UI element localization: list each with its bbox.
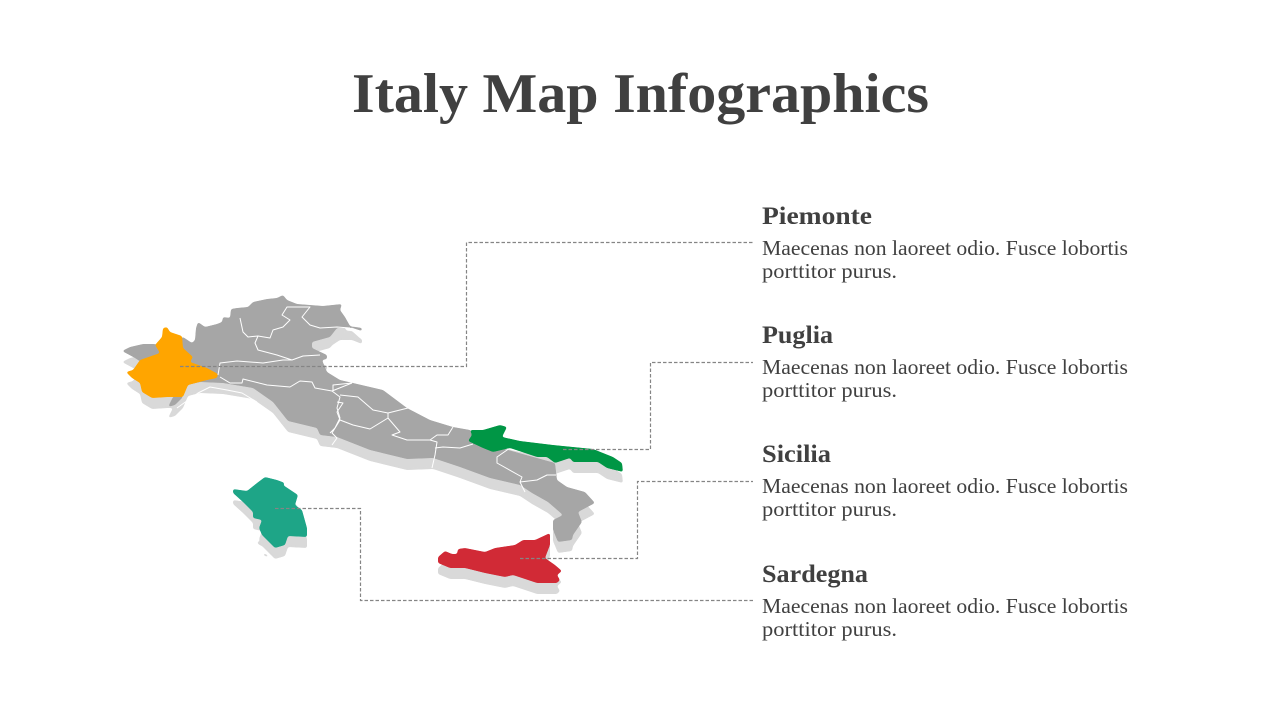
text block: Sardegna: Maecenas non laoreet odio. Fusce lobortis bbox=[762, 594, 1128, 618]
text block: Piemonte bbox=[762, 203, 1128, 283]
text block: Sicilia: Sicilia bbox=[762, 441, 832, 468]
text block: Sicilia bbox=[762, 441, 1128, 521]
text block: Puglia bbox=[762, 322, 1128, 402]
connector: Sicilia bbox=[520, 482, 753, 558]
text block: Puglia: Maecenas non laoreet odio. Fusce lobortis bbox=[762, 355, 1128, 379]
text block: Sicilia: Maecenas non laoreet odio. Fusce lobortis bbox=[762, 474, 1128, 498]
connector: Sardegna bbox=[275, 508, 753, 600]
text block: Piemonte: porttitor purus. bbox=[762, 259, 897, 283]
region: Sicilia bbox=[438, 533, 562, 583]
text block: Sicilia: porttitor purus. bbox=[762, 497, 897, 521]
text block: Puglia: porttitor purus. bbox=[762, 378, 897, 402]
text block: Puglia: Puglia bbox=[762, 322, 834, 349]
region: Puglia bbox=[468, 425, 623, 472]
map drop shadow bbox=[122, 306, 623, 594]
text block: Sardegna: Sardegna bbox=[762, 561, 869, 588]
text block: Sardegna: porttitor purus. bbox=[762, 617, 897, 641]
title: Italy Map Infographics bbox=[352, 63, 929, 125]
region: Piemonte bbox=[126, 327, 218, 398]
text block: Piemonte: Piemonte bbox=[762, 203, 872, 230]
connector: Piemonte bbox=[180, 242, 753, 366]
connector: Puglia bbox=[563, 362, 753, 450]
text block: Piemonte: Maecenas non laoreet odio. Fusce lobortis bbox=[762, 236, 1128, 260]
map of Italy bbox=[122, 295, 623, 594]
mainland regions bbox=[122, 295, 595, 542]
region: Sardegna bbox=[233, 477, 307, 548]
text block: Sardegna bbox=[762, 561, 1128, 641]
